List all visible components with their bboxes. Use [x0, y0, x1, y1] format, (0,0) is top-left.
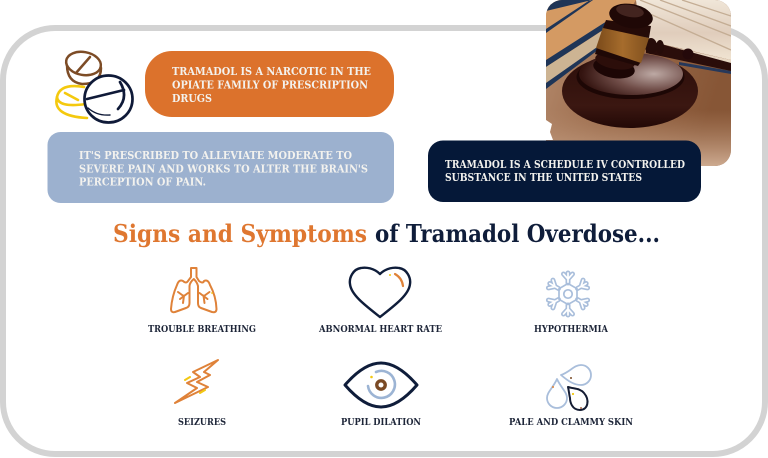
icon: pills [56, 49, 132, 123]
gavel [592, 0, 731, 81]
icon: drops [547, 365, 591, 410]
heading [113, 219, 660, 248]
callout: narcotic: OPIATE FAMILY OF PRESCRIPTION [172, 78, 368, 92]
icon: lightning bolt [175, 360, 218, 403]
callout: narcotic: DRUGS [172, 92, 212, 105]
heading: of Tramadol Overdose... [375, 219, 660, 248]
callout: prescribed use [48, 132, 394, 203]
label: pupil dilation: PUPIL DILATION [341, 417, 422, 428]
brown pill [64, 49, 103, 84]
icon: lungs [171, 268, 216, 312]
label: hypothermia: HYPOTHERMIA [534, 324, 609, 335]
sounding block [562, 53, 698, 128]
yellow pill [56, 86, 87, 118]
heading: Signs and Symptoms [113, 219, 367, 248]
callout: prescribed use: IT'S PRESCRIBED TO ALLEVIATE MODERATE TO [79, 149, 352, 162]
callout: schedule IV [428, 140, 701, 202]
label: seizures: SEIZURES [178, 417, 226, 428]
icon: snowflake [548, 273, 588, 315]
callout: narcotic: TRAMADOL IS A NARCOTIC IN THE [172, 65, 371, 78]
label: pale and clammy skin: PALE AND CLAMMY SKIN [509, 417, 634, 428]
callout: schedule IV: SUBSTANCE IN THE UNITED STATES [445, 171, 642, 184]
navy pill [84, 76, 132, 122]
label: abnormal heart rate: ABNORMAL HEART RATE [318, 324, 442, 335]
photo: gavel on books [546, 0, 731, 166]
callout: narcotic [145, 51, 394, 117]
callout: prescribed use: SEVERE PAIN AND WORKS TO ALTER THE BRAIN'S [79, 162, 368, 176]
icon: eye [345, 363, 417, 407]
icon: heart [350, 268, 410, 317]
callout: prescribed use: PERCEPTION OF PAIN. [79, 176, 206, 188]
label: trouble breathing: TROUBLE BREATHING [148, 324, 256, 335]
callout: schedule IV: TRAMADOL IS A SCHEDULE IV CONTROLLED [445, 158, 685, 171]
